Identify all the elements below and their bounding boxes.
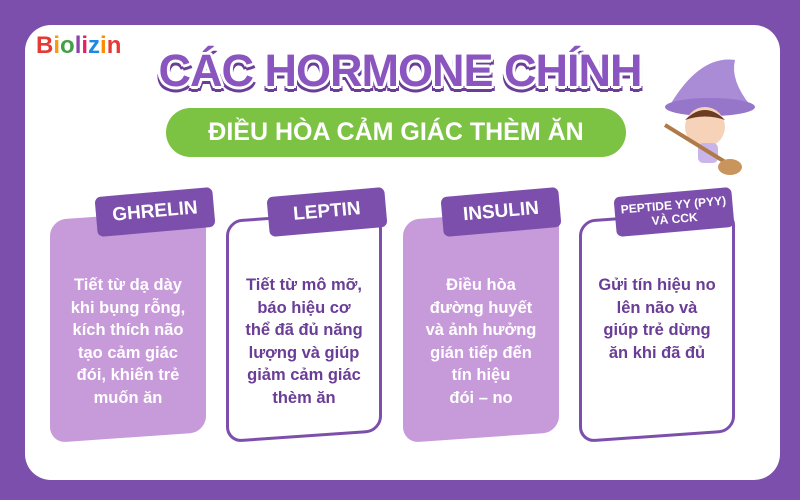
text: ăn khi đã đủ	[609, 344, 705, 362]
text: gián tiếp đến	[430, 344, 532, 362]
text: tạo cảm giác	[78, 344, 178, 362]
subtitle pill	[166, 108, 626, 157]
panel: insulin	[403, 187, 561, 442]
icon: witch character	[664, 60, 755, 175]
text: Tiết từ mô mỡ,	[246, 276, 362, 294]
panel: ghrelin	[50, 187, 215, 442]
text: Tiết từ dạ dày	[74, 276, 182, 294]
text: đói – no	[449, 388, 513, 406]
text: PEPTIDE YY (PYY)	[620, 193, 727, 217]
text: kích thích não	[73, 321, 183, 339]
panel: pyy cck	[579, 187, 735, 442]
text: giúp trẻ dừng	[603, 321, 711, 339]
text: đói, khiến trẻ	[77, 366, 179, 384]
logo: Biolizin	[36, 32, 121, 59]
text: thể đã đủ năng	[245, 321, 363, 339]
subtitle pill: ĐIỀU HÒA CẢM GIÁC THÈM ĂN	[208, 118, 584, 146]
text: thèm ăn	[272, 388, 336, 406]
text: giảm cảm giác	[247, 366, 361, 384]
text: INSULIN	[462, 198, 540, 225]
text: và ảnh hưởng	[426, 321, 536, 339]
text: khi bụng rỗng,	[71, 298, 185, 316]
text: VÀ CCK	[651, 210, 698, 228]
text: đường huyết	[430, 298, 532, 316]
text: Điều hòa	[446, 276, 516, 294]
text: muốn ăn	[94, 388, 162, 406]
text: lượng và giúp	[249, 344, 359, 362]
title: CÁC HORMONE CHÍNH	[158, 45, 642, 96]
panel: leptin	[226, 187, 387, 442]
text: báo hiệu cơ	[257, 298, 351, 316]
text: lên não và	[617, 298, 697, 316]
text: tín hiệu	[452, 366, 510, 384]
text: LEPTIN	[292, 198, 362, 225]
text: Gửi tín hiệu no	[598, 276, 716, 294]
text: GHRELIN	[111, 197, 198, 226]
